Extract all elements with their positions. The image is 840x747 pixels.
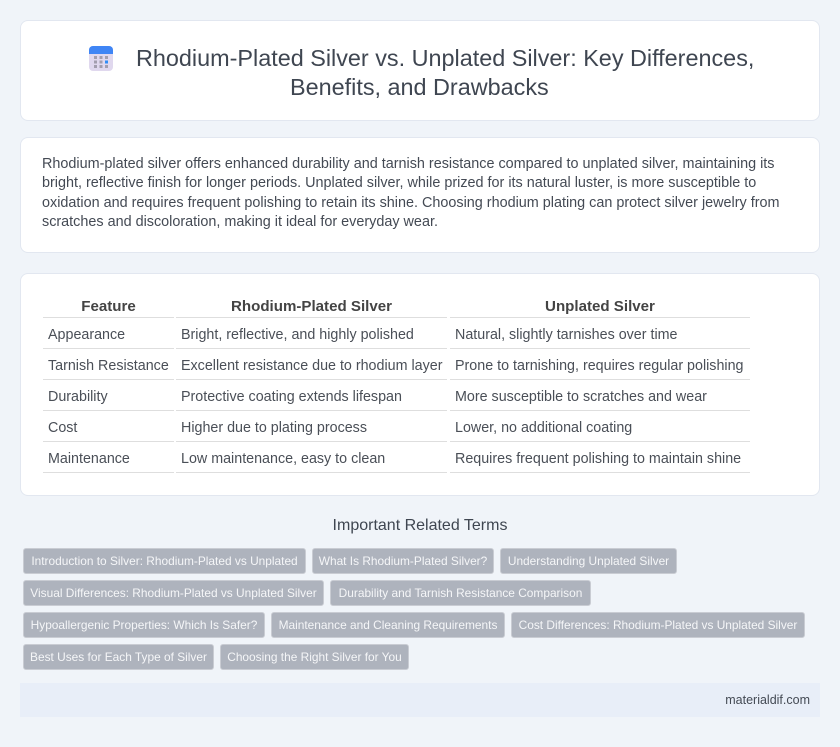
comparison table — [43, 298, 750, 473]
footer source: materialdif.com — [725, 693, 810, 707]
intro paragraph: scratches and discoloration, making it ideal for everyday wear. — [42, 214, 438, 230]
related terms tags: Cost Differences: Rhodium-Plated vs Unplated Silver — [519, 618, 797, 632]
footer bar — [20, 683, 820, 717]
related terms tags: Maintenance and Cleaning Requirements — [279, 618, 497, 632]
comparison table: Natural, slightly tarnishes over time — [455, 327, 677, 343]
comparison table: Higher due to plating process — [181, 420, 367, 436]
related terms heading: Important Related Terms — [333, 517, 507, 534]
related terms tags: Introduction to Silver: Rhodium-Plated vs Unplated — [31, 554, 298, 568]
related terms tags: Hypoallergenic Properties: Which Is Safer? — [31, 618, 257, 632]
comparison table: Unplated Silver — [545, 298, 655, 315]
related terms tags — [23, 548, 805, 670]
comparison table: Excellent resistance due to rhodium layer — [181, 358, 442, 374]
comparison table: Durability — [48, 389, 108, 405]
title: Benefits, and Drawbacks — [290, 74, 549, 100]
related terms tags: Durability and Tarnish Resistance Comparison — [339, 586, 582, 600]
comparison table: Protective coating extends lifespan — [181, 389, 402, 405]
comparison table: Low maintenance, easy to clean — [181, 451, 385, 467]
icon: calendar — [89, 46, 113, 71]
intro paragraph: Rhodium-plated silver offers enhanced durability and tarnish resistance compared to unplated silver, maintaining its — [42, 156, 774, 172]
intro paragraph — [42, 156, 780, 230]
intro text panel — [20, 137, 820, 253]
comparison table: Requires frequent polishing to maintain shine — [455, 451, 741, 467]
related terms tags: Best Uses for Each Type of Silver — [30, 650, 207, 664]
comparison table: Bright, reflective, and highly polished — [181, 327, 414, 343]
header panel — [20, 20, 820, 121]
title: Rhodium-Plated Silver vs. Unplated Silver: Key Differences, — [136, 45, 754, 71]
comparison table: Cost — [48, 420, 77, 436]
intro paragraph: bright, reflective finish for longer periods. Unplated silver, while prized for its natural luster, is more susceptible to — [42, 175, 756, 191]
comparison table: Prone to tarnishing, requires regular polishing — [455, 358, 744, 374]
related terms tags: Visual Differences: Rhodium-Plated vs Unplated Silver — [30, 586, 317, 600]
title — [136, 45, 754, 100]
related terms tags: What Is Rhodium-Plated Silver? — [319, 554, 487, 568]
comparison table: Tarnish Resistance — [48, 358, 169, 374]
comparison table: Appearance — [48, 327, 125, 343]
comparison table: More susceptible to scratches and wear — [455, 389, 707, 405]
comparison table: Rhodium-Plated Silver — [231, 298, 392, 315]
comparison table: Lower, no additional coating — [455, 420, 632, 436]
related terms tags: Choosing the Right Silver for You — [227, 650, 402, 664]
intro paragraph: oxidation and requires frequent polishing to retain its shine. Choosing rhodium plating can protect silver jewelry from — [42, 195, 780, 211]
comparison table: Feature — [81, 298, 136, 315]
comparison table panel — [20, 273, 820, 496]
related terms tags: Understanding Unplated Silver — [508, 554, 669, 568]
comparison table: Maintenance — [48, 451, 130, 467]
